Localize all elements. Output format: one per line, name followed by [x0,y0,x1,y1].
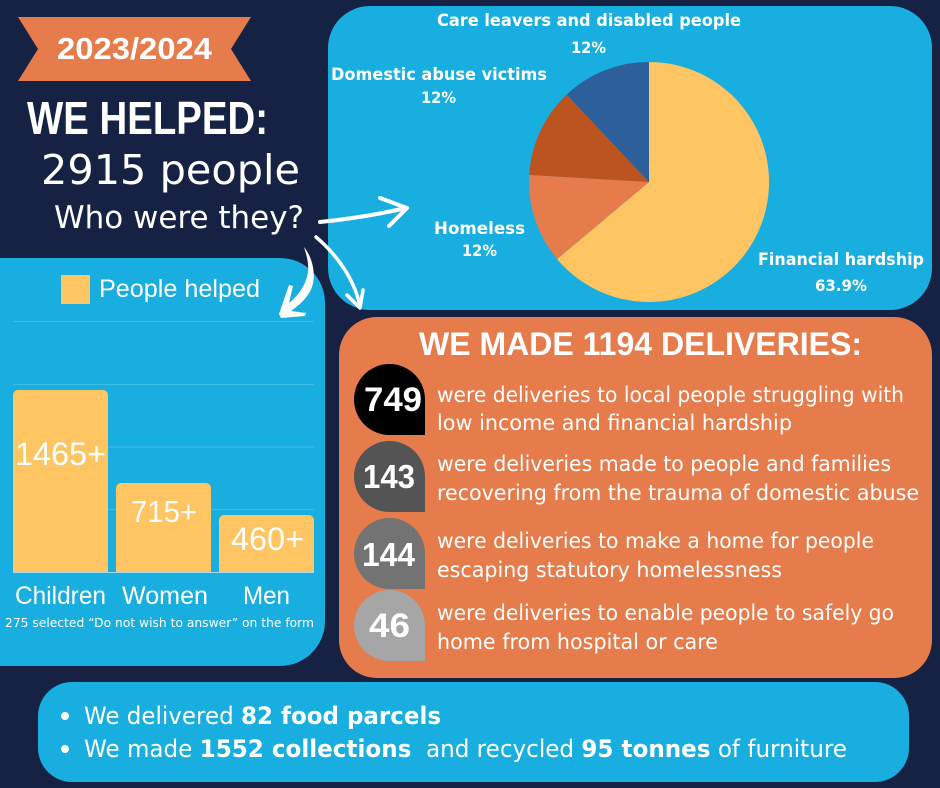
heading: we helped: WE HELPED: [27,92,268,144]
item: 144: were deliveries to make a home for people [437,529,874,553]
label: domestic abuse: Domestic abuse victims [331,65,547,85]
bullet: collections: We made 1552 collections and recycled 95 tonnes of furniture [84,735,847,763]
label: financial hardship [758,250,924,295]
label: homeless [434,219,525,260]
panel: pie chart [328,6,932,310]
pie chart [529,62,769,302]
banner: year [18,17,251,81]
bar: men: 460+ [231,521,304,557]
label: homeless: Homeless [434,219,525,239]
bar: women: 715+ [131,494,197,529]
item: 749 [354,364,904,435]
label: care leavers: 12% [571,38,606,57]
item: 749: were deliveries to local people struggling with [437,383,904,407]
label: domestic abuse: 12% [421,88,456,107]
label: care leavers [437,11,741,57]
bar: children: 1465+ [15,436,106,472]
item: 749: 749 [364,381,422,419]
item: 749: low income and financial hardship [437,411,792,435]
text: 2915 people: 2915 people [41,146,300,194]
arrow: to pie chart [320,198,407,226]
banner: year: 2023/2024 [57,31,213,66]
item: 46 [354,590,894,661]
label: domestic abuse [331,65,547,107]
bar: children [13,390,108,572]
item: 144: escaping statutory homelessness [437,558,782,582]
panel: people helped bar chart [0,258,325,666]
text: who were they: Who were they? [54,200,304,236]
axis labels: Children [15,582,106,610]
item: 46: home from hospital or care [437,630,718,654]
item: 143: recovering from the trauma of domestic abuse [437,481,919,505]
bar: women [116,483,211,572]
bullet: food parcels: We delivered 82 food parcels [84,702,441,730]
axis labels: Men [243,582,290,610]
arrow: to deliveries [316,237,363,308]
footnote: 275 selected “Do not wish to answer” on the form [5,616,314,630]
panel: deliveries [339,317,932,678]
item: 46: were deliveries to enable people to safely go [437,601,894,625]
legend: People helped [99,275,260,303]
item: 46: 46 [369,607,410,645]
item: 144 [354,518,874,589]
axis labels: Women [122,582,208,610]
label: financial hardship: 63.9% [815,276,867,295]
axis labels [15,582,290,610]
item: 143: were deliveries made to people and families [437,452,891,476]
panel: summary [38,682,909,782]
heading: deliveries: WE MADE 1194 DELIVERIES: [419,326,862,362]
label: homeless: 12% [462,241,497,260]
bar: men [219,515,314,572]
item: 144: 144 [362,536,416,573]
item: 143 [354,441,919,512]
label: financial hardship: Financial hardship [758,250,924,270]
item: 143: 143 [363,458,415,495]
label: care leavers: Care leavers and disabled people [437,11,741,31]
arrow: to bar chart [279,247,314,318]
